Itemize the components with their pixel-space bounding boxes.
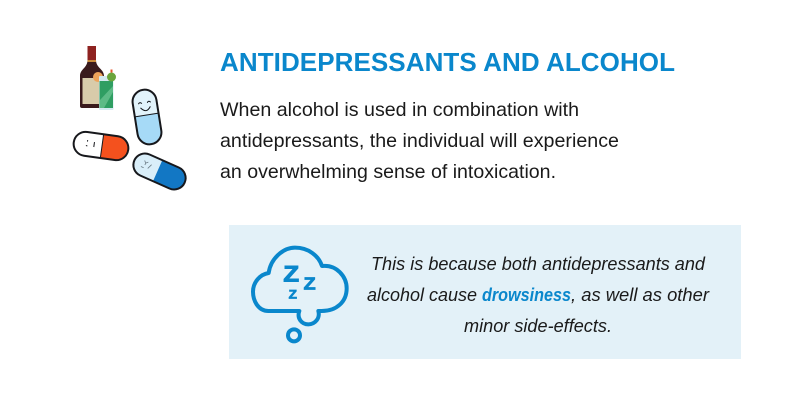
intro text (220, 99, 619, 183)
title: ANTIDEPRESSANTS AND ALCOHOL (220, 47, 675, 77)
panel: drowsiness callout (229, 225, 741, 359)
callout text: This is because both antidepressants and (371, 253, 706, 274)
callout text: minor side-effects. (464, 315, 612, 336)
intro text: antidepressants, the individual will experience (220, 130, 619, 152)
icon: sleep thought cloud: Z (283, 261, 299, 286)
icon: smiling light blue pill (131, 88, 163, 146)
callout text: , as well as other (571, 284, 710, 305)
icon: sleep thought cloud: Z (289, 288, 297, 302)
icon: green drink (99, 70, 116, 110)
intro text: an overwhelming sense of intoxication. (220, 161, 556, 183)
icon: dark blue pill (130, 150, 189, 193)
icon: orange pill (72, 130, 130, 162)
callout text: alcohol cause (367, 284, 477, 305)
illustration: bottle, drink and pills (72, 46, 189, 193)
callout text (367, 253, 710, 336)
icon: sleep thought cloud: Z (304, 273, 316, 293)
intro text: When alcohol is used in combination with (220, 99, 579, 121)
icon: liquor bottle (80, 46, 104, 108)
icon: sleep thought cloud (253, 248, 347, 341)
callout text: drowsiness (482, 284, 571, 305)
